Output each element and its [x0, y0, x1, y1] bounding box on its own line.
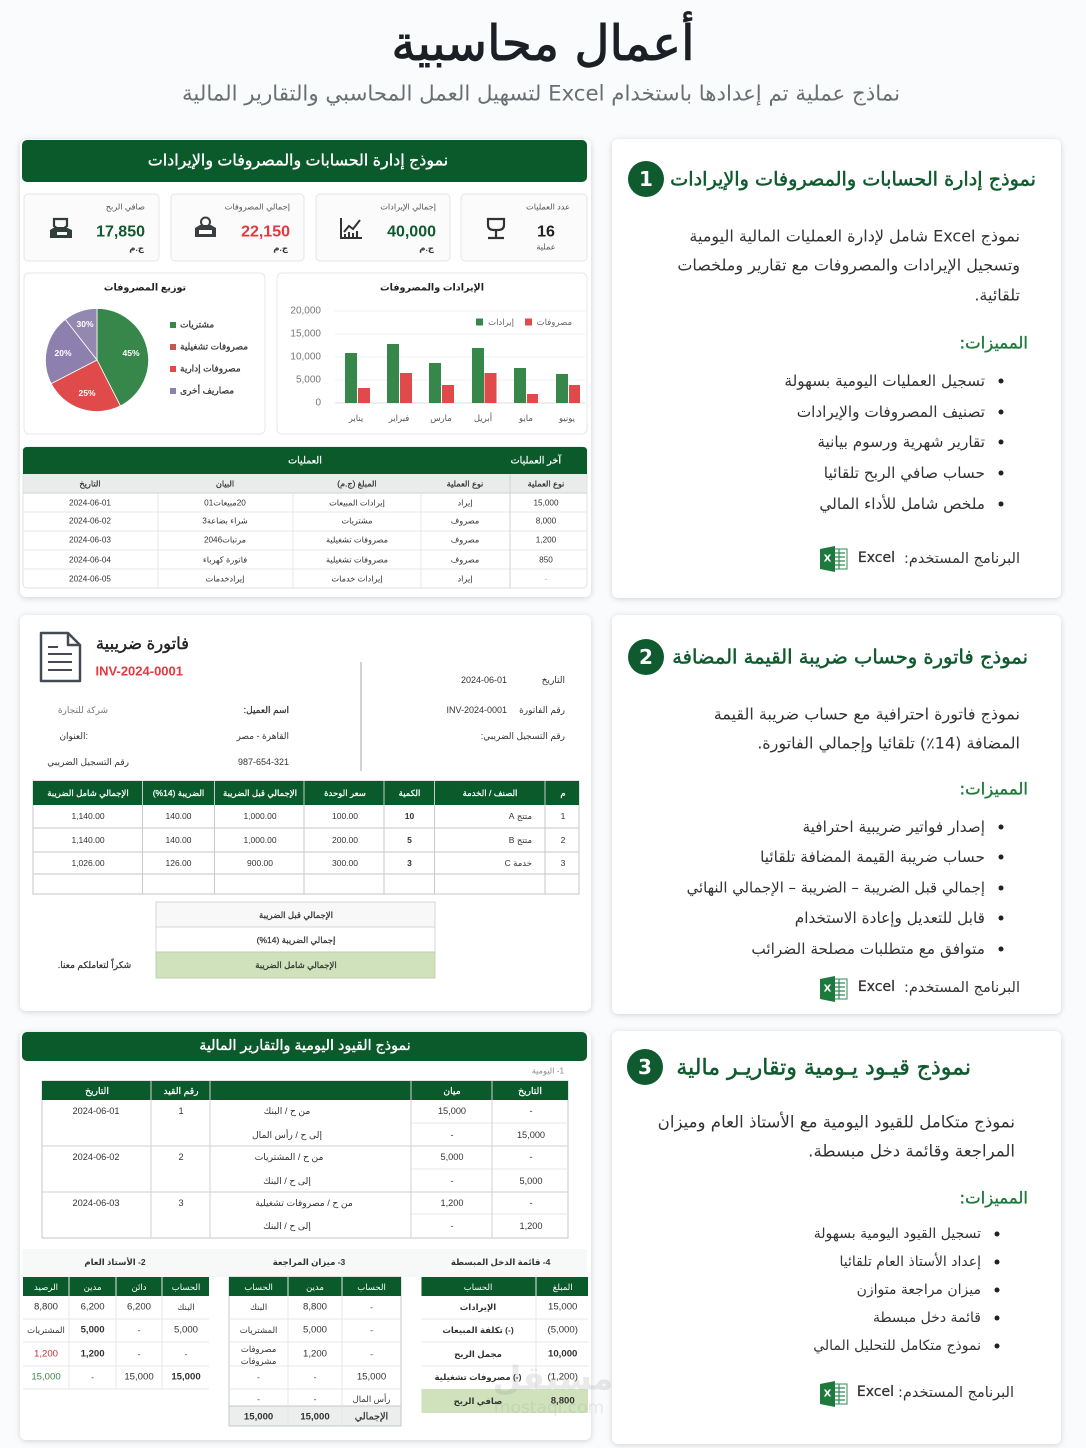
recent operations table: مصروف [451, 536, 479, 544]
income statement table: صافي الربح [454, 1396, 502, 1407]
trial balance table: رأس المال [353, 1393, 390, 1404]
features list 1: حساب صافي الربح تلقائيا [824, 464, 985, 483]
journal table: 5,000 [520, 1176, 542, 1186]
invoice meta: اسم العميل: [244, 705, 289, 716]
general ledger table: 15,000 [124, 1372, 154, 1382]
journal table: - [529, 1198, 533, 1208]
heading 3: نموذج قيـود يـومية وتقاريـر مالية [676, 1056, 971, 1080]
panel: accounts dashboard [20, 139, 591, 597]
heading 2: نموذج فاتورة وحساب ضريبة القيمة المضافة [672, 646, 1028, 668]
invoice table: 1,140.00 [71, 835, 105, 845]
general ledger table: البنك [177, 1302, 195, 1312]
trial balance table: 1,200 [303, 1348, 327, 1360]
invoice title: فاتورة ضريبية [96, 635, 189, 654]
income statement table: 10,000 [548, 1348, 577, 1360]
trial balance table: الإجمالي [355, 1412, 388, 1422]
journal table: من ح / المشتريات [255, 1152, 323, 1162]
invoice table: 3 [561, 858, 566, 868]
invoice table: 3 [407, 858, 412, 868]
invoice table: الضريبة (14%) [153, 788, 204, 798]
journal table: 5,000 [440, 1152, 464, 1162]
description 1: تلقائية. [974, 286, 1020, 304]
journal table: 2 [178, 1152, 184, 1162]
general ledger table: الرصيد [34, 1282, 58, 1292]
title: أعمال محاسبية [391, 11, 695, 72]
number badge 3: 3 [638, 1055, 652, 1079]
features list 1: تصنيف المصروفات والإيرادات [797, 403, 985, 421]
income statement table: مجمل الربح [454, 1349, 502, 1360]
features list 3: تسجيل القيود اليومية بسهولة [814, 1226, 981, 1242]
journal table [42, 1081, 568, 1238]
program used 2: البرنامج المستخدم: [904, 980, 1020, 996]
journal table: إلى ح / رأس المال [252, 1129, 322, 1141]
program used 2 [820, 976, 1020, 1002]
invoice table: متتج A [509, 811, 532, 821]
recent operations table: إيراد [458, 498, 472, 508]
KPI: expenses [171, 194, 304, 261]
journal table: - [450, 1130, 454, 1140]
bar chart panel: 10,000 [290, 352, 321, 362]
invoice meta: 987-654-321 [238, 757, 289, 767]
trial balance table: - [370, 1302, 373, 1312]
trial balance table: مدين [306, 1282, 324, 1292]
journal table: من ح / البنك [264, 1106, 310, 1116]
watermark [493, 1358, 613, 1418]
general ledger table: مدين [84, 1282, 102, 1292]
income statement table: (1,200) [547, 1372, 578, 1382]
KPI: expenses: إجمالي المصروفات [225, 202, 290, 212]
description 2: المضافة (14٪) تلقائيا وإجمالي الفاتورة. [757, 734, 1020, 754]
pie chart panel: 25% [78, 388, 96, 398]
income statement table: (5,000) [547, 1324, 578, 1336]
income statement table: (-) تكلفة المبيعات [442, 1325, 514, 1335]
KPI: revenue: إجمالي الإيرادات [380, 202, 436, 212]
chart legend: مصروفات [537, 317, 572, 327]
invoice meta: رقم التسجيل الضريبي: [481, 731, 565, 742]
recent operations table: مصروف [451, 516, 479, 526]
recent operations table [23, 447, 587, 588]
chart legend: إيرادات [488, 317, 514, 328]
invoice table: 900.00 [247, 858, 273, 868]
general ledger table: المشتريات [27, 1325, 65, 1335]
panel: model 2 description [612, 615, 1061, 1014]
journal header: نموذج القيود اليومية والتقارير المالية [199, 1038, 411, 1054]
trial balance table: - [257, 1372, 260, 1382]
panel: model 1 description [612, 139, 1061, 598]
invoice table: 100.00 [332, 811, 358, 821]
description 1: وتسجيل الإيرادات والمصروفات مع تقارير وملخصات [677, 256, 1020, 276]
journal table: 15,000 [438, 1106, 466, 1116]
section titles band: 2- الأستاذ العام [84, 1257, 146, 1268]
invoice totals: إجمالي الضريبة (14%) [257, 935, 335, 946]
invoice table: الإجمالي قبل الضريبة [223, 788, 297, 799]
dashboard header: نموذج إدارة الحسابات والمصروفات والإيرادات [148, 152, 448, 170]
month labels: يونيو [558, 413, 576, 423]
KPI: revenue [316, 194, 450, 261]
journal table: 1,200 [440, 1198, 464, 1208]
recent operations table: 850 [539, 556, 553, 564]
journal header [22, 1032, 587, 1061]
journal table: 1,200 [520, 1221, 542, 1231]
trial balance table: البنك [250, 1302, 267, 1312]
recent operations table: فاتورة كهرباء [203, 556, 247, 564]
description 1: نموذج Excel شامل لإدارة العمليات المالية اليومية [689, 226, 1020, 246]
watermark: mostaql.com [494, 1398, 604, 1418]
general ledger table: دائن [132, 1282, 147, 1292]
icon: excel: X [824, 1388, 832, 1400]
journal table: - [529, 1152, 533, 1162]
month labels [348, 412, 576, 423]
program used 3: البرنامج المستخدم: [898, 1385, 1014, 1401]
pie legend [170, 320, 248, 396]
features heading 3: المميزات: [960, 1188, 1028, 1208]
income statement table: المبلغ [553, 1282, 573, 1292]
recent operations table: مصروف [451, 556, 479, 564]
program used 1: البرنامج المستخدم: [904, 551, 1020, 567]
KPI: revenue: ج.م [419, 243, 435, 254]
recent operations table: البيان [216, 480, 234, 488]
features heading 2: المميزات: [960, 780, 1028, 800]
general ledger table: الحساب [172, 1282, 200, 1292]
general ledger table: 6,200 [127, 1302, 151, 1312]
trial balance table: 15,000 [244, 1412, 273, 1422]
recent operations table: التاريخ [79, 480, 101, 488]
general ledger table: 15,000 [171, 1372, 201, 1382]
invoice table: 1,026.00 [71, 858, 105, 868]
invoice table: 140.00 [166, 811, 192, 821]
invoice totals: الإجمالي قبل الضريبة [259, 910, 333, 921]
invoice meta: القاهرة - مصر [235, 731, 289, 741]
invoice meta: 2024-06-01 [461, 675, 507, 685]
features list 3: ميزان مراجعة متوازن [857, 1282, 981, 1298]
general ledger table: - [91, 1372, 94, 1382]
recent operations table: نوع العملية [528, 480, 564, 488]
recent operations table: 8,000 [536, 516, 557, 526]
trial balance table: مصروفات [241, 1344, 276, 1354]
number badge 3 [627, 1049, 663, 1085]
invoice table [33, 781, 579, 894]
general ledger table: 5,000 [174, 1324, 198, 1336]
recent operations table: مصروفات تشغيلية [326, 536, 388, 544]
KPI: net profit: ج.م [129, 243, 145, 254]
KPI: operations count [461, 194, 587, 261]
section titles band [22, 1249, 587, 1277]
invoice table: 1,000.00 [243, 811, 277, 821]
general ledger table: 1,200 [81, 1348, 105, 1360]
description 3: المراجعة وقائمة دخل مبسطة. [808, 1142, 1015, 1162]
pie chart panel: 30% [76, 319, 94, 329]
recent operations table: 15,000 [533, 498, 559, 508]
general ledger table: - [138, 1325, 141, 1335]
invoice table: م [560, 788, 566, 798]
invoice meta: رقم الفاتورة [519, 705, 565, 716]
KPI: net profit [24, 194, 159, 261]
invoice table: 5 [407, 835, 412, 845]
invoice table: الكمية [399, 788, 420, 798]
income statement table [422, 1277, 588, 1413]
icon: document [41, 633, 80, 681]
invoice table: 1,140.00 [71, 811, 105, 821]
trial balance table: - [370, 1349, 373, 1359]
invoice table: 300.00 [332, 858, 358, 868]
panel: model 3 description [612, 1031, 1061, 1444]
features list 1: ملخص شامل للأداء المالي [819, 494, 985, 514]
pie chart [45, 308, 149, 412]
recent operations table: آخر العمليات [511, 454, 562, 466]
invoice table: 140.00 [166, 835, 192, 845]
trial balance table: 15,000 [357, 1372, 386, 1382]
description 2: نموذج فاتورة احترافية مع حساب ضريبة القيمة [714, 704, 1020, 724]
invoice totals [156, 902, 435, 978]
journal table: ميان [443, 1086, 461, 1096]
features list 3: قائمة دخل مبسطة [873, 1310, 981, 1326]
general ledger table: 15,000 [31, 1372, 61, 1382]
recent operations table: - [545, 574, 548, 584]
section titles band: 4- قائمة الدخل المبسطة [451, 1257, 551, 1267]
journal table: 3 [178, 1198, 184, 1208]
features list 2: إصدار فواتير ضريبية احترافية [802, 818, 985, 836]
recent operations table: المبلغ (ج.م) [337, 480, 377, 488]
features list 2 [687, 818, 1004, 959]
recent operations table: 2024-06-02 [69, 516, 111, 526]
pie legend: مصاريف أخرى [180, 384, 234, 396]
heading 1: نموذج إدارة الحسابات والمصروفات والإيرادات [670, 168, 1036, 192]
journal table: - [450, 1176, 454, 1186]
invoice meta: INV-2024-0001 [446, 705, 507, 715]
journal table: رقم القيد [163, 1086, 199, 1097]
income statement table: 8,800 [551, 1396, 575, 1406]
income statement table: الإيرادات [460, 1302, 496, 1313]
trial balance table: الحساب [357, 1282, 386, 1292]
recent operations table: إيراد [458, 574, 472, 584]
journal table: - [450, 1221, 454, 1231]
invoice number: INV-2024-0001 [96, 664, 183, 678]
invoice table: 2 [561, 835, 566, 845]
invoice meta: رقم التسجيل الضريبي [47, 757, 129, 768]
journal caption: 1- اليومية [532, 1066, 564, 1076]
program used 1 [820, 546, 1020, 572]
KPI: operations count: عملية [536, 242, 556, 252]
invoice meta: :العنوان [59, 731, 88, 741]
journal table: التاريخ [518, 1086, 542, 1096]
KPI: expenses: 22,150 [241, 224, 290, 240]
bars: expenses [358, 373, 580, 403]
general ledger table: - [185, 1349, 188, 1359]
invoice table: متتج B [509, 835, 532, 845]
bar chart panel [277, 273, 587, 434]
pie chart panel: توزيع المصروفات [104, 282, 186, 294]
program used 2: Excel [858, 979, 895, 995]
invoice table: 1,000.00 [243, 835, 277, 845]
month labels: مارس [430, 413, 452, 423]
icon: excel [820, 1381, 847, 1407]
number badge 1: 1 [639, 167, 653, 191]
pie chart panel [24, 273, 265, 434]
program used 3 [820, 1381, 1014, 1407]
trial balance table: الحساب [244, 1282, 273, 1292]
KPI: operations count: 16 [537, 224, 555, 240]
KPI: expenses: ج.م [273, 243, 289, 254]
trial balance table: 15,000 [300, 1412, 330, 1422]
description 3 [658, 1112, 1015, 1162]
recent operations table: شراء بضاعة3 [202, 516, 248, 526]
trial balance table: المشتريات [240, 1325, 277, 1335]
invoice table: سعر الوحدة [324, 788, 366, 798]
KPI: revenue: 40,000 [387, 224, 436, 240]
journal table: 2024-06-03 [72, 1198, 120, 1208]
invoice totals: الإجمالي شامل الضريبة [255, 960, 337, 971]
icon: excel [820, 546, 847, 572]
invoice table: 1 [561, 811, 566, 821]
trial balance table: - [370, 1325, 373, 1335]
journal table: إلى ح / البنك [263, 1221, 311, 1232]
pie legend: مشتريات [180, 320, 214, 330]
KPI: net profit: صافي الربح [106, 202, 145, 212]
recent operations table: 2024-06-03 [69, 536, 111, 544]
trial balance table: - [314, 1372, 317, 1382]
dashboard header [22, 140, 587, 182]
journal table: - [529, 1106, 533, 1116]
program used 1: Excel [858, 550, 895, 566]
invoice meta [47, 675, 565, 768]
watermark: مستقل [493, 1358, 613, 1398]
features list 2: حساب ضريبة القيمة المضافة تلقائيا [760, 848, 985, 866]
month labels: يناير [348, 413, 364, 423]
features list 2: إجمالي قبل الضريبة – الضريبة – الإجمالي النهائي [687, 880, 985, 896]
KPI: net profit: 17,850 [96, 224, 145, 240]
section titles band: 3- ميزان المراجعة [273, 1257, 346, 1268]
subtitle: نماذج عملية تم إعدادها باستخدام Excel لتسهيل العمل المحاسبي والتقارير المالية [182, 82, 900, 106]
thank you note: شكراً لتعاملكم معنا. [58, 958, 131, 971]
features list 3 [813, 1226, 1000, 1354]
journal table: 2024-06-02 [72, 1152, 120, 1162]
description 3: نموذج متكامل للقيود اليومية مع الأستاذ العام وميزان [658, 1112, 1015, 1132]
invoice table: خدمة C [505, 858, 532, 868]
recent operations table: 2024-06-01 [69, 498, 111, 508]
recent operations table: مشتريات [341, 516, 373, 526]
features list 1: تسجيل العمليات اليومية بسهولة [784, 372, 985, 391]
pie legend: مصروفات إدارية [180, 364, 241, 374]
features list 1 [784, 372, 1004, 514]
bar chart panel: 5,000 [296, 374, 321, 386]
number badge 1 [628, 161, 664, 197]
journal table: 1 [178, 1106, 184, 1116]
features list 1: تقارير شهرية ورسوم بيانية [817, 433, 985, 452]
icon: excel: X [824, 554, 832, 564]
KPI: operations count: عدد العمليات [526, 202, 570, 212]
number badge 2: 2 [639, 645, 653, 669]
recent operations table: إيرادخدمات [206, 574, 244, 584]
trial balance table: 8,800 [303, 1302, 327, 1312]
description 1 [677, 226, 1020, 304]
icon: excel: X [824, 984, 832, 994]
month labels: أبريل [474, 412, 492, 423]
program used 3: Excel [857, 1384, 894, 1400]
recent operations table: إيرادات خدمات [331, 574, 383, 584]
general ledger table: 1,200 [34, 1348, 58, 1360]
bar chart panel: الإيرادات والمصروفات [380, 282, 484, 294]
recent operations table: العمليات [288, 456, 322, 466]
features list 3: نموذج متكامل للتحليل المالي [813, 1338, 981, 1354]
general ledger table: - [138, 1349, 141, 1359]
general ledger table [23, 1277, 209, 1389]
general ledger table: 5,000 [81, 1324, 105, 1336]
recent operations table: إيرادات المبيعات [329, 498, 385, 508]
bar chart panel: 20,000 [290, 306, 321, 316]
panel: journal entries and reports [20, 1032, 591, 1440]
features list 3: إعداد الأستاذ العام تلقائيا [839, 1252, 981, 1270]
month labels: مايو [518, 413, 533, 423]
journal table: التاريخ [85, 1086, 109, 1096]
number badge 2 [628, 639, 664, 675]
bars: revenue [345, 344, 568, 403]
invoice meta: التاريخ [542, 675, 565, 685]
invoice table: 200.00 [332, 835, 358, 845]
features list 2: متوافق مع متطلبات مصلحة الضرائب [751, 940, 985, 959]
trial balance table: 5,000 [303, 1324, 327, 1336]
panel: tax invoice [20, 615, 591, 1011]
features heading 1: المميزات: [960, 334, 1028, 354]
trial balance table [229, 1277, 401, 1426]
invoice table: الإجمالي شامل الضريبة [47, 788, 129, 799]
journal table: من ح / مصروفات تشغيلية [255, 1198, 353, 1208]
journal table: إلى ح / البنك [263, 1176, 311, 1187]
income statement table: (-) مصروفات تشغيلية [435, 1372, 522, 1383]
bar chart panel: 15,000 [290, 328, 321, 340]
recent operations table: مصروفات تشغيلية [326, 556, 388, 564]
general ledger table: 6,200 [81, 1302, 105, 1312]
recent operations table: مرتبات2046 [204, 536, 246, 544]
general ledger table: 8,800 [34, 1302, 58, 1312]
journal table: 15,000 [517, 1130, 545, 1140]
pie chart panel: 20% [54, 348, 72, 358]
recent operations table: نوع العملية [447, 480, 483, 488]
pie chart panel: 45% [122, 348, 140, 358]
bar chart panel: 0 [315, 398, 321, 408]
pie legend: مصروفات تشغيلية [180, 342, 248, 352]
features list 2: قابل للتعديل وإعادة الاستخدام [795, 909, 985, 927]
income statement table: الحساب [464, 1282, 492, 1292]
chart legend [476, 317, 572, 328]
recent operations table: 2024-06-04 [69, 556, 111, 564]
invoice meta: شركة للتجارة [58, 705, 108, 715]
trial balance table: - [314, 1394, 317, 1404]
invoice table: 126.00 [166, 858, 192, 868]
journal table: 2024-06-01 [72, 1106, 120, 1116]
recent operations table: 1,200 [536, 536, 557, 544]
invoice table: الصنف / الخدمة [463, 788, 517, 798]
month labels: فبراير [388, 413, 409, 423]
invoice table: 10 [405, 811, 414, 821]
icon: excel [820, 976, 847, 1002]
recent operations table: 2024-06-05 [69, 574, 111, 584]
income statement table: 15,000 [548, 1302, 577, 1312]
trial balance table: - [257, 1394, 260, 1404]
recent operations table: 20مبيعات01 [204, 498, 246, 508]
description 2 [714, 704, 1020, 754]
trial balance table: مشروفات [241, 1356, 276, 1366]
